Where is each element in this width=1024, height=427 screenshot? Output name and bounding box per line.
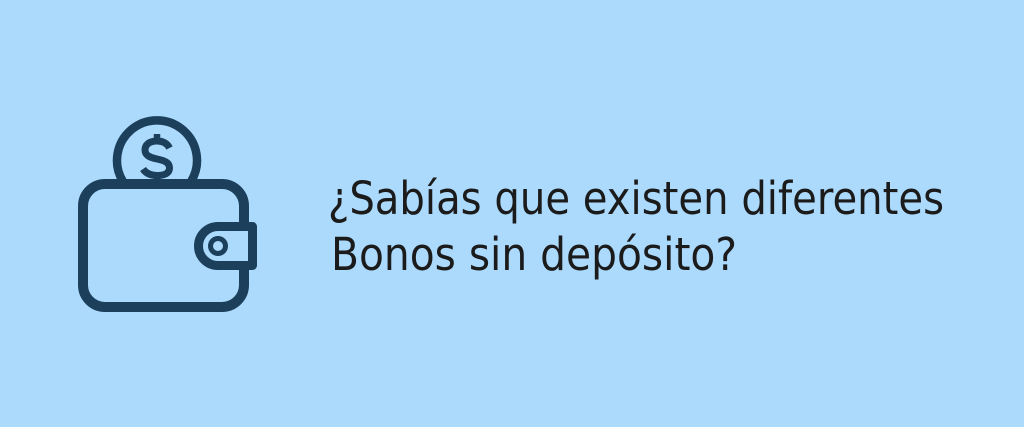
icon: clasp button xyxy=(210,238,226,254)
heading text xyxy=(328,172,944,281)
icon: coin xyxy=(117,120,197,182)
heading line 1: ¿Sabías que existen diferentes xyxy=(328,172,944,225)
icon: wallet clasp xyxy=(198,226,252,266)
icon: wallet with dollar coin xyxy=(83,120,252,307)
icon: wallet body xyxy=(83,184,244,307)
heading line 2: Bonos sin depósito? xyxy=(331,228,737,281)
